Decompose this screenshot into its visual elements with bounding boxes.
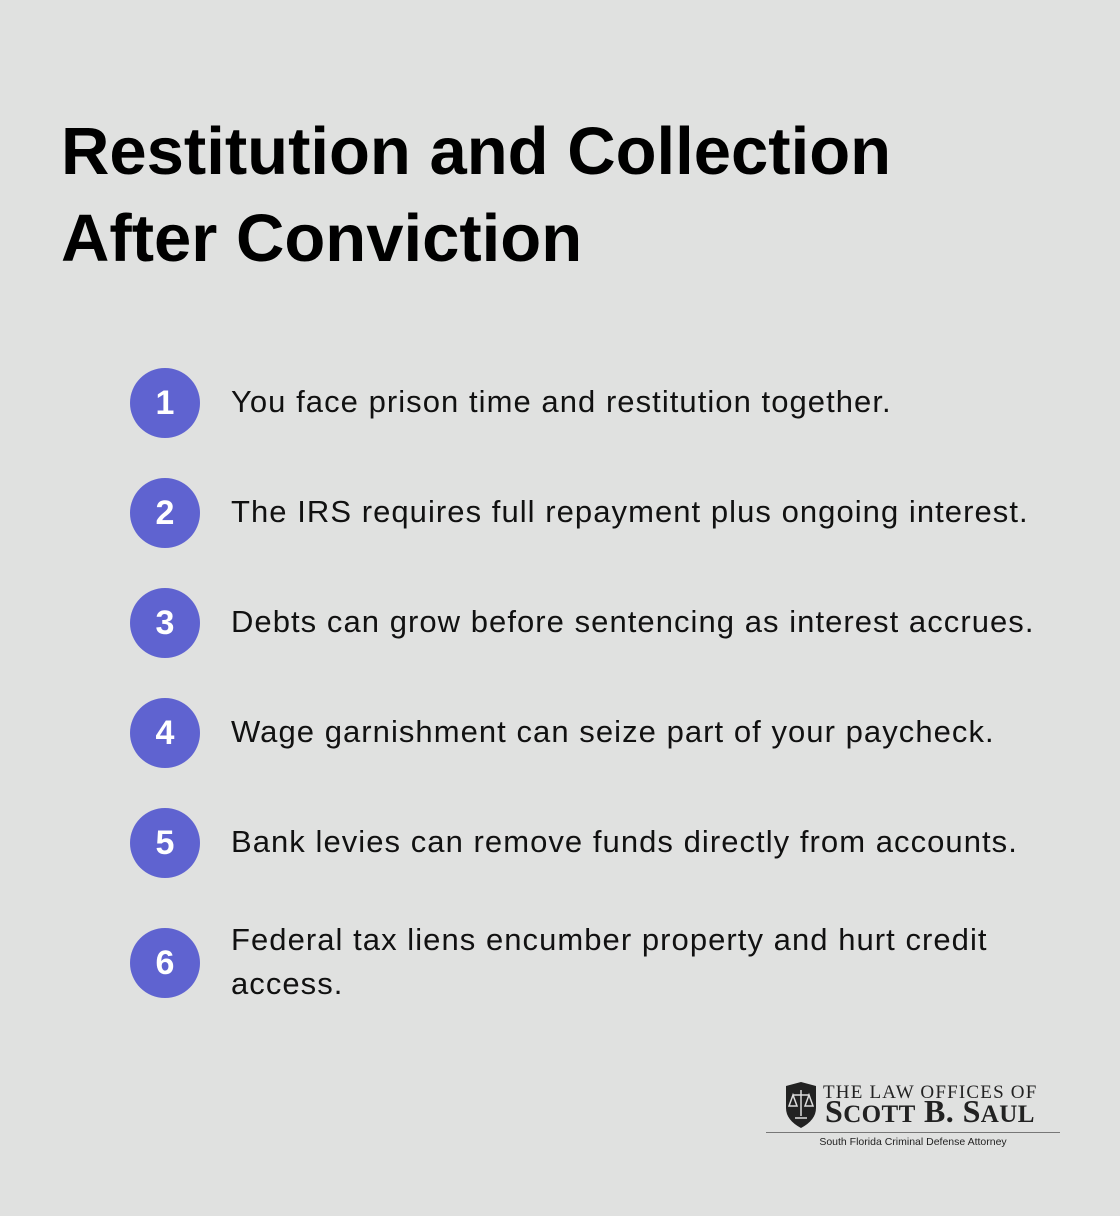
item 1: 1 — [156, 384, 174, 422]
item 3: Debts can grow before sentencing as interest accrues. — [231, 604, 1034, 639]
item 6: access. — [231, 966, 343, 1001]
item 1 — [130, 368, 892, 438]
logo: South Florida Criminal Defense Attorney — [819, 1136, 1007, 1148]
item 6: Federal tax liens encumber property and hurt credit — [231, 922, 988, 957]
item 5: 5 — [156, 824, 174, 862]
item 2: The IRS requires full repayment plus ongoing interest. — [231, 494, 1029, 529]
item 6 — [130, 922, 988, 1001]
item 5: Bank levies can remove funds directly from accounts. — [231, 824, 1018, 859]
item 2: 2 — [156, 494, 174, 532]
item 2 — [130, 478, 1029, 548]
title: Restitution and Collection — [61, 114, 891, 189]
item 1: You face prison time and restitution together. — [231, 384, 892, 419]
icon: shield — [786, 1082, 816, 1128]
item 4: 4 — [156, 714, 174, 752]
item 6: 6 — [156, 944, 174, 982]
logo: SCOTT B. SAUL — [825, 1093, 1035, 1129]
item 5 — [130, 808, 1018, 878]
title: After Conviction — [61, 201, 582, 276]
item 3 — [130, 588, 1034, 658]
item 4 — [130, 698, 995, 768]
title — [61, 114, 891, 276]
logo — [766, 1082, 1060, 1148]
logo text: THE LAW OFFICES OF — [823, 1082, 1038, 1103]
item 4: Wage garnishment can seize part of your paycheck. — [231, 714, 995, 749]
item 3: 3 — [156, 604, 174, 642]
